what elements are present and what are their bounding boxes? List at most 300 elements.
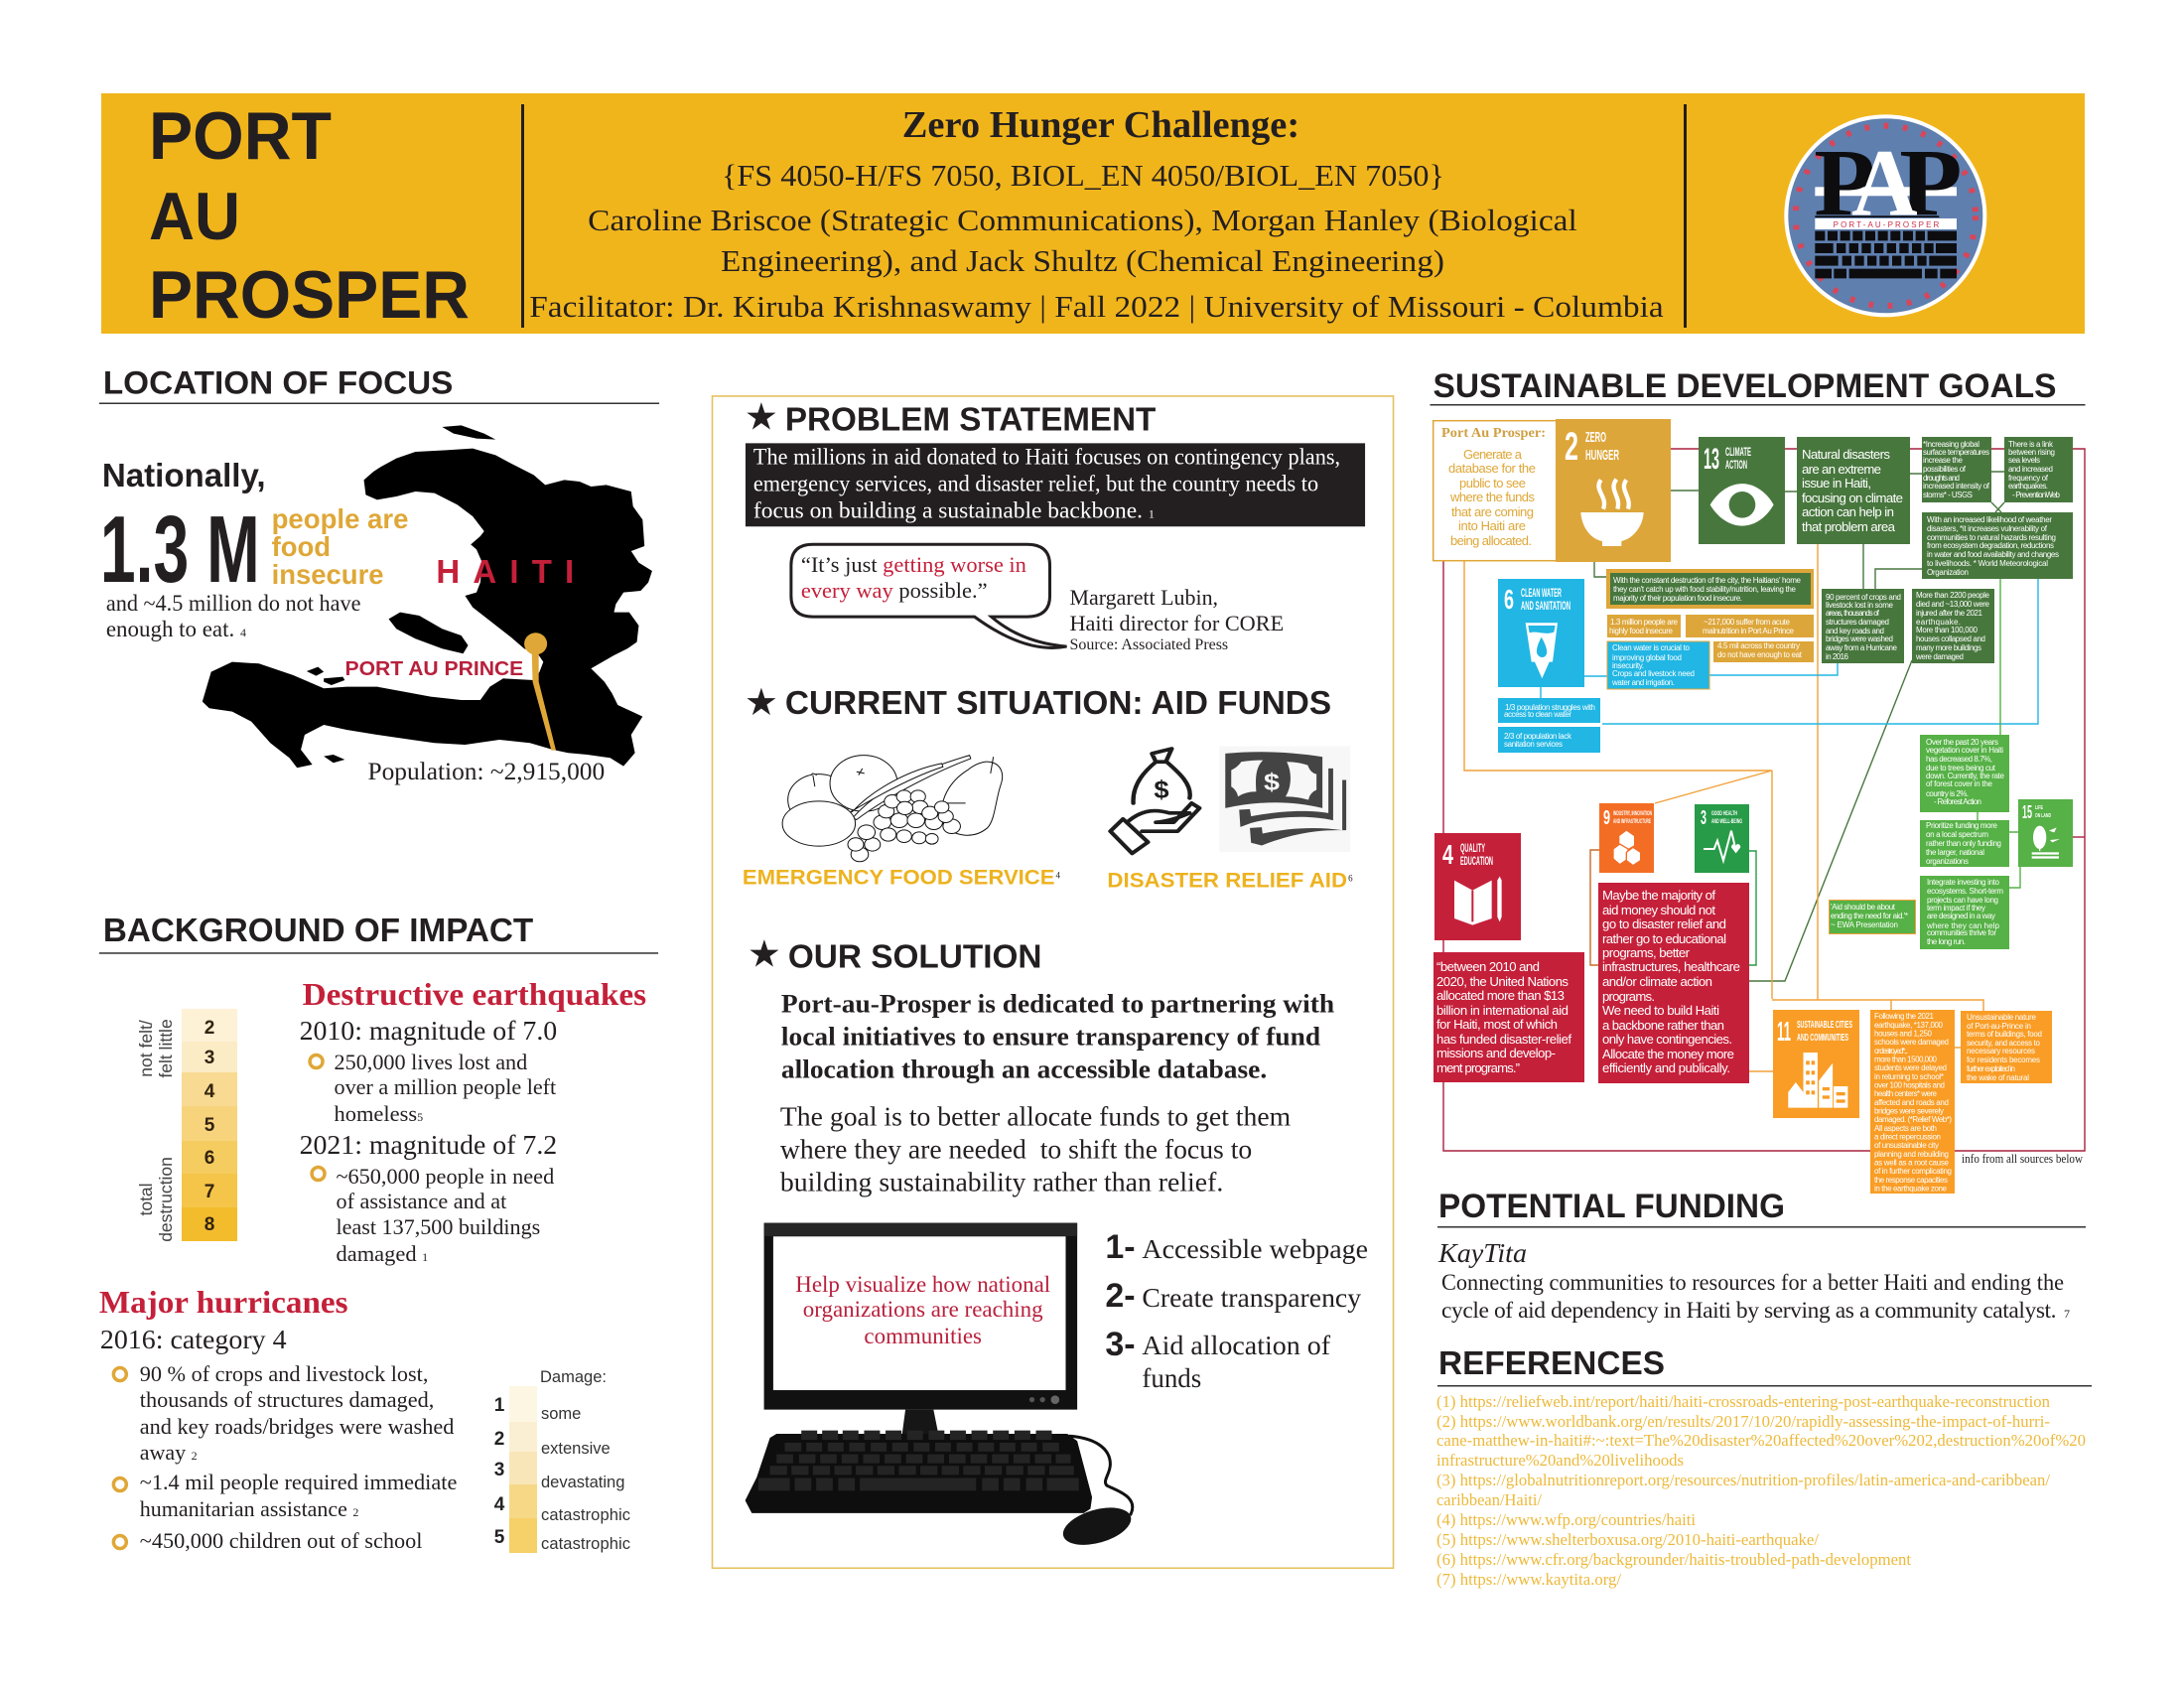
SDG text: United Nations aid: allocated more than $13 xyxy=(1436,988,1565,1003)
solution steps list: 2- xyxy=(1105,1277,1136,1315)
hurricane damage scale: catastrophic xyxy=(541,1535,630,1553)
SDG tile 3: good health: GOOD HEALTH xyxy=(1711,810,1737,817)
SDG text: prioritize funding: the larger, national xyxy=(1926,848,1984,857)
SDG text: crops lost: 90 percent of crops and xyxy=(1826,593,1901,602)
challenge title and team: Zero Hunger Challenge: xyxy=(902,104,1299,146)
stat: nationally food insecure: people are xyxy=(272,503,408,534)
references list: (2) https://www.worldbank.org/en/results/2017/10/20/rapidly-assessing-the-impact-of-hurri- xyxy=(1436,1412,2050,1431)
SDG text: earthquake impacts: or destroyed*... xyxy=(1874,1047,1908,1055)
SDG stat: 1.3 million xyxy=(1607,615,1681,637)
speech bubble quote xyxy=(791,544,1066,647)
text: major hurricanes: 90 % of crops and livestock lost, xyxy=(140,1361,428,1386)
SDG text: United Nations aid: for Haiti, most of which xyxy=(1436,1017,1558,1032)
SDG text: weather disasters: disasters, *it increases vulnerability of xyxy=(1927,524,2048,533)
SDG stat: 217,000 malnutrition: malnutrition in Port Au Prince xyxy=(1703,627,1795,635)
earthquake scale: destruction xyxy=(156,1157,176,1242)
SDG text: integrate investing: are designed in a way xyxy=(1927,912,1995,920)
SDG text: vegetation cover: has decreased 8.7%, xyxy=(1926,755,1992,764)
SDG text: United Nations aid: 2020, the United Nations xyxy=(1436,974,1569,989)
SDG text: prioritize funding: on a local spectrum xyxy=(1926,830,1988,839)
SDG tile 2: zero hunger: HUNGER xyxy=(1585,447,1619,464)
heading: current situation: ★ xyxy=(745,680,778,724)
SDG text: weather disasters: to livelihoods. * World Meteorological xyxy=(1927,559,2048,568)
problem statement box: The millions in aid donated to Haiti focuses on contingency plans, xyxy=(753,444,1340,470)
text: major hurricanes: and key roads/bridges were washed xyxy=(140,1414,454,1439)
SDG text: call to action: rather go to educational xyxy=(1602,931,1726,946)
icon: bowl xyxy=(1580,480,1644,546)
SDG text: natural disasters: focusing on climate xyxy=(1802,491,1903,505)
caption: disaster relief aid: DISASTER RELIEF AID xyxy=(1107,869,1347,893)
text: major hurricanes: thousands of structures damaged, xyxy=(140,1387,434,1412)
solution statement: allocation through an accessible database. xyxy=(781,1055,1267,1083)
SDG tile 3: good health: AND WELL-BEING xyxy=(1711,818,1742,825)
SDG text: United Nations aid: has funded disaster-relief xyxy=(1436,1032,1571,1047)
SDG text: clean water: Crops and livestock need xyxy=(1612,669,1695,678)
screen text xyxy=(795,1272,1050,1348)
SDG callout: Port Au Prosper: Generate a xyxy=(1463,447,1523,462)
SDG stat: sanitation xyxy=(1498,727,1600,753)
hurricane damage scale: extensive xyxy=(541,1440,611,1458)
SDG text: clean water: water and irrigation. xyxy=(1611,678,1675,687)
solution goal text: where they are needed to shift the focus to xyxy=(780,1134,1252,1164)
SDG text: earthquake deaths: many more buildings xyxy=(1916,643,1981,652)
references list: (5) https://www.shelterboxusa.org/2010-haiti-earthquake/ xyxy=(1436,1530,1819,1549)
SDG text: vegetation cover: due to trees being cut xyxy=(1926,764,1996,773)
SDG stat: 1.3 million: 1.3 million people are xyxy=(1610,618,1679,627)
text: destructive earthquakes: of assistance and at xyxy=(337,1189,507,1213)
SDG text: unsustainable nature: further exploited in xyxy=(1967,1064,2015,1073)
SDG text: unsustainable nature: the wake of natural xyxy=(1967,1073,2029,1082)
solution goal text: The goal is to better allocate funds to get them xyxy=(780,1101,1291,1131)
SDG text: crops lost xyxy=(1822,589,1904,663)
icon: eye with globe xyxy=(1710,484,1774,526)
SDG text: earthquake deaths: More than 100,000 xyxy=(1916,626,1979,634)
SDG text: weather disasters: from ecosystem degradation, reductions xyxy=(1927,541,2054,550)
text: KayTita funding: Connecting communities to resources for a better Haiti and ending the xyxy=(1441,1270,2064,1296)
icon: heartbeat xyxy=(1704,831,1740,861)
SDG tile 4: quality education: QUALITY xyxy=(1460,843,1485,855)
SDG text: call to action: go to disaster relief and xyxy=(1602,916,1726,931)
note: info from sources: info from all sources below xyxy=(1962,1152,2083,1166)
SDG text: earthquake impacts: earthquake, *137,000 xyxy=(1874,1021,1944,1030)
heading: background of impact: BACKGROUND OF IMPACT xyxy=(103,912,533,948)
icon: tree xyxy=(2032,826,2060,859)
SDG tile 3: good health xyxy=(1695,804,1749,873)
SDG text: earthquake deaths: died and ~13,000 were xyxy=(1916,600,1990,609)
SDG text: call to action: Maybe the majority of xyxy=(1602,888,1715,903)
challenge title and team: Caroline Briscoe (Strategic Communications), Morgan Hanley (Biological xyxy=(588,203,1577,237)
SDG text: earthquake deaths xyxy=(1912,589,1994,663)
icon: cash bills: $ xyxy=(1264,769,1280,795)
panel: center column xyxy=(712,394,1394,1568)
SDG text: call to action: a backbone rather than xyxy=(1602,1018,1724,1033)
illustration: computer xyxy=(746,1223,1136,1552)
solution goal text xyxy=(780,1101,1291,1196)
SDG text: integrate investing: Integrate investing into xyxy=(1927,878,2000,887)
SDG text: unsustainable nature: for residents becomes xyxy=(1967,1055,2040,1064)
SDG tile 2: zero hunger xyxy=(1556,419,1671,562)
SDG text: United Nations aid: billion in international aid xyxy=(1436,1003,1569,1018)
references list: infrastructure%20and%20livelihoods xyxy=(1436,1451,1684,1470)
heading: current situation: CURRENT SITUATION: AID FUNDS xyxy=(785,684,1331,721)
SDG text: earthquake deaths: were damaged xyxy=(1915,652,1964,661)
SDG tile 13: climate action: CLIMATE xyxy=(1725,445,1751,459)
stat: nationally food insecure: insecure xyxy=(272,559,384,590)
SDG text: crops lost: structures damaged xyxy=(1826,618,1889,627)
heading: our solution: ★ xyxy=(748,932,781,976)
SDG diagram connectors xyxy=(1443,449,2085,1151)
SDG text: clean water xyxy=(1607,641,1709,689)
SDG text: integrate investing: ecosystems. Short-term xyxy=(1927,887,2003,896)
SDG text: surface temperatures: possibilities of xyxy=(1923,465,1967,474)
SDG tile 2: zero hunger: 2 xyxy=(1565,425,1578,469)
text: destructive earthquakes: over a million people left xyxy=(335,1074,557,1099)
SDG text: earthquake impacts: as well as a root cause xyxy=(1874,1158,1950,1168)
SDG text: weather disasters: in water and food availability and changes xyxy=(1927,550,2059,559)
SDG text: call to action: aid money should not xyxy=(1602,903,1715,917)
SDG tile 11: sustainable cities: SUSTAINABLE CITIES xyxy=(1797,1020,1852,1031)
SDG text: call to action: programs. xyxy=(1602,989,1655,1004)
SDG text: integrate investing: where they can help xyxy=(1926,921,2000,930)
SDG stat: sanitation: 2/3 of population lack xyxy=(1504,732,1572,741)
hurricane damage scale: 5 xyxy=(494,1527,505,1548)
SDG text: unsustainable nature: Unsustainable nature xyxy=(1967,1013,2037,1022)
SDG text: weather disasters: Organization xyxy=(1927,568,1969,577)
heading: problem statement: ★ xyxy=(745,394,778,438)
text: major hurricanes: away 2 xyxy=(140,1440,198,1465)
SDG text: call to action: Allocate the money more xyxy=(1602,1047,1734,1061)
icon: city xyxy=(1788,1053,1847,1108)
SDG tile 4: quality education: 4 xyxy=(1442,839,1453,870)
references list: (7) https://www.kaytita.org/ xyxy=(1436,1570,1621,1589)
problem statement box xyxy=(746,443,1365,526)
references list: cane-matthew-in-haiti#:~:text=The%20disaster%20affected%20over%202,destruction%20of%20 xyxy=(1436,1431,2086,1450)
SDG text: call to action: only have contingencies. xyxy=(1602,1032,1732,1047)
SDG text: natural disasters: issue in Haiti, xyxy=(1802,476,1871,491)
stat: nationally food insecure xyxy=(100,457,408,641)
SDG callout: Port Au Prosper xyxy=(1433,421,1557,561)
SDG text: unsustainable nature: of Port-au-Prince in xyxy=(1967,1022,2031,1031)
SDG text: crops lost: away from a Hurricane xyxy=(1826,643,1898,652)
SDG text: call to action: We need to build Haiti xyxy=(1602,1003,1719,1018)
text: destructive earthquakes xyxy=(300,977,646,1266)
SDG text: integrate investing: projects can have long xyxy=(1927,896,1998,905)
references list: (6) https://www.cfr.org/backgrounder/haitis-troubled-path-development xyxy=(1436,1550,1911,1569)
project name: AU xyxy=(149,179,240,254)
problem statement box: focus on building a sustainable backbone. 1 xyxy=(753,497,1155,523)
SDG text: surface temperatures: increase the xyxy=(1923,456,1964,465)
text: destructive earthquakes: Destructive earthquakes xyxy=(303,977,646,1012)
SDG text: prioritize funding: rather than only funding xyxy=(1926,839,2001,848)
SDG tile 11: sustainable cities: 11 xyxy=(1777,1016,1791,1047)
SDG text: United Nations aid xyxy=(1433,952,1584,1082)
heading: our solution: OUR SOLUTION xyxy=(788,938,1042,975)
challenge title and team: Engineering), and Jack Shultz (Chemical Engineering) xyxy=(721,243,1444,278)
logo: PAP keyboard: P xyxy=(1899,130,1963,236)
icon: fruit and vegetables xyxy=(782,756,1003,862)
hurricane damage scale: 1 xyxy=(494,1395,505,1416)
screen text: Help visualize how national xyxy=(795,1272,1050,1297)
SDG text: crops lost: bridges were washed xyxy=(1826,634,1893,643)
text: KayTita funding: 7 xyxy=(2064,1307,2070,1321)
SDG text: clean water: Clean water is crucial to xyxy=(1612,643,1691,652)
SDG stat: access to clean water xyxy=(1498,698,1600,723)
icon: cubes xyxy=(1613,830,1641,866)
stat: nationally food insecure: 1.3 M xyxy=(100,496,260,603)
challenge title and team xyxy=(529,104,1664,324)
SDG text: earthquake deaths: More than 2200 people xyxy=(1916,591,1990,600)
solution steps list: Accessible webpage xyxy=(1142,1234,1368,1264)
quote attribution: Source: Associated Press xyxy=(1069,636,1228,653)
SDG text: aid should end need: ending the need for aid.'* xyxy=(1831,912,1908,920)
SDG text: surface temperatures: droughts and xyxy=(1923,474,1960,483)
SDG stat: 4.5 million xyxy=(1713,641,1814,662)
SDG text: call to action: infrastructures, healthcare xyxy=(1602,959,1740,974)
SDG text: earthquake deaths: earthquake. xyxy=(1916,618,1961,627)
SDG tile 11: sustainable cities xyxy=(1773,1010,1859,1118)
earthquake scale: 8 xyxy=(205,1214,214,1235)
challenge title and team: {FS 4050-H/FS 7050, BIOL_EN 4050/BIOL_EN 7050} xyxy=(722,158,1444,193)
SDG text: earthquake impacts: students were delayed xyxy=(1874,1063,1947,1072)
solution goal text: building sustainability rather than relief. xyxy=(780,1167,1223,1196)
quote attribution: Haiti director for CORE xyxy=(1069,611,1284,635)
text: destructive earthquakes: 250,000 lives lost and xyxy=(335,1050,527,1074)
earthquake scale: not felt/ xyxy=(136,1020,156,1077)
text: major hurricanes: humanitarian assistance 2 xyxy=(140,1496,358,1521)
SDG text: call to action: efficiently and publically. xyxy=(1602,1060,1730,1075)
SDG text: earthquake impacts: more than 1500,000 xyxy=(1874,1055,1938,1064)
icon: water glass xyxy=(1526,623,1558,678)
solution steps list: funds xyxy=(1142,1363,1201,1393)
map of Haiti xyxy=(203,425,652,768)
SDG stat: 217,000 malnutrition xyxy=(1686,615,1814,637)
SDG text: vegetation cover: country is 2%. xyxy=(1926,789,1969,798)
SDG text: constant destruction: majority of their population food insecure. xyxy=(1613,594,1742,603)
logo: PAP keyboard: PORT-AU-PROSPER xyxy=(1834,220,1940,229)
SDG text: sea levels: There is a link xyxy=(2008,440,2054,449)
map labels: PORT AU PRINCE xyxy=(345,658,523,680)
SDG callout: Port Au Prosper: public to see xyxy=(1459,476,1526,491)
SDG text: sea levels: sea levels xyxy=(2008,456,2040,465)
SDG text: call to action: and/or climate action xyxy=(1602,974,1712,989)
SDG text: earthquake deaths: houses collapsed and xyxy=(1916,634,1985,643)
hurricane damage scale xyxy=(494,1368,630,1553)
earthquake scale: 3 xyxy=(205,1048,214,1068)
SDG text: prioritize funding: organizations xyxy=(1926,857,1969,866)
SDG text: earthquake impacts: a direct repercussion xyxy=(1874,1132,1941,1142)
earthquake scale: 2 xyxy=(205,1018,214,1039)
SDG callout: Port Au Prosper: being allocated. xyxy=(1450,533,1532,548)
SDG text: unsustainable nature: security, and access to xyxy=(1967,1039,2041,1048)
SDG text: vegetation cover: vegetation cover in Haiti xyxy=(1926,746,2003,755)
SDG text: sea levels: between rising xyxy=(2008,448,2055,457)
stat: nationally food insecure: Nationally, xyxy=(102,457,266,493)
SDG tile 11: sustainable cities: AND COMMUNITIES xyxy=(1797,1033,1848,1044)
icon: cash bills xyxy=(1219,747,1350,852)
SDG text: earthquake impacts xyxy=(1870,1010,1955,1194)
SDG text: natural disasters: that problem area xyxy=(1802,519,1896,534)
SDG text: vegetation cover: Over the past 20 years xyxy=(1926,738,1998,747)
heading: problem statement: PROBLEM STATEMENT xyxy=(785,400,1156,437)
SDG text: vegetation cover: - Reforest Action xyxy=(1934,797,1981,806)
SDG stat: sanitation: sanitation services xyxy=(1504,740,1563,749)
SDG text: surface temperatures: surface temperatures xyxy=(1923,448,1989,457)
SDG tile 6: clean water: CLEAN WATER xyxy=(1521,588,1562,600)
map labels xyxy=(345,553,605,785)
text: KayTita funding xyxy=(1437,1238,2070,1324)
SDG text: prioritize funding: Prioritize funding more xyxy=(1926,821,1998,830)
SDG text: vegetation cover: down. Currently, the rate xyxy=(1926,772,2005,780)
SDG text: call to action xyxy=(1598,883,1749,1083)
SDG text: United Nations aid: missions and develop- xyxy=(1436,1046,1556,1060)
SDG text: surface temperatures: storms* - USGS xyxy=(1923,491,1973,499)
SDG text: surface temperatures: *Increasing global xyxy=(1923,440,1979,449)
SDG text: earthquake impacts: health centers* were xyxy=(1874,1089,1938,1098)
SDG text: weather disasters: communities to natural hazards resulting xyxy=(1927,533,2056,542)
heading: potential funding: POTENTIAL FUNDING xyxy=(1438,1188,1785,1225)
map labels: HAITI xyxy=(436,553,574,590)
hurricane damage scale: catastrophic xyxy=(541,1506,630,1524)
icon: money bag in hand: $ xyxy=(1154,775,1169,803)
SDG tile 9: industry: INDUSTRY, INNOVATION xyxy=(1613,810,1652,817)
SDG text: aid should end need xyxy=(1829,900,1916,933)
solution statement: local initiatives to ensure transparency of fund xyxy=(781,1023,1321,1052)
SDG text: earthquake impacts: of unsustainable city xyxy=(1874,1141,1939,1150)
logo: PAP keyboard xyxy=(1784,114,1986,317)
SDG callout: Port Au Prosper: where the funds xyxy=(1449,490,1535,504)
text: destructive earthquakes: least 137,500 buildings xyxy=(337,1214,540,1239)
SDG text: vegetation cover xyxy=(1920,735,2009,812)
SDG tile 9: industry xyxy=(1599,803,1654,873)
SDG stat: 1.3 million: highly food insecure xyxy=(1609,627,1674,635)
SDG text: natural disasters: are an extreme xyxy=(1802,462,1881,477)
SDG tile 13: climate action xyxy=(1699,437,1785,544)
references list: (4) https://www.wfp.org/countries/haiti xyxy=(1436,1510,1696,1529)
SDG tile 9: industry: 9 xyxy=(1603,807,1610,829)
SDG text: natural disasters: action can help in xyxy=(1802,504,1894,519)
SDG tile 2: zero hunger: ZERO xyxy=(1585,429,1606,446)
SDG text: earthquake impacts: over 100 hospitals and xyxy=(1874,1080,1945,1090)
earthquake scale: felt little xyxy=(156,1019,176,1078)
SDG tile 15: life on land: 15 xyxy=(2022,802,2032,822)
SDG text: constant destruction xyxy=(1606,569,1814,609)
earthquake scale xyxy=(136,1009,237,1242)
SDG text: clean water: improving global food xyxy=(1612,653,1682,662)
SDG callout: Port Au Prosper: that are coming xyxy=(1451,504,1534,519)
SDG text: earthquake impacts: in returning to school* xyxy=(1874,1072,1944,1081)
SDG tile 6: clean water xyxy=(1498,579,1584,687)
hurricane damage scale: 3 xyxy=(494,1460,504,1480)
SDG text: earthquake impacts: Following the 2021 xyxy=(1874,1012,1935,1021)
SDG text: United Nations aid: ment programs.” xyxy=(1436,1060,1520,1075)
speech bubble quote: “It’s just getting worse in xyxy=(801,552,1026,577)
SDG text: crops lost: and key roads and xyxy=(1826,627,1884,635)
icon: book and pencil xyxy=(1454,877,1502,925)
SDG text: vegetation cover: of forest cover in the xyxy=(1926,779,1993,788)
SDG text: unsustainable nature xyxy=(1961,1011,2052,1083)
SDG text: earthquake impacts: of in further complicating xyxy=(1874,1167,1952,1176)
SDG stat: 4.5 million: 4.5 mil across the country xyxy=(1717,641,1800,650)
quote attribution xyxy=(1069,585,1284,653)
SDG text: aid should end need: ~ EWA Presentation xyxy=(1831,920,1898,929)
SDG text: earthquake impacts: damaged. (*Relief Web*) xyxy=(1874,1115,1952,1124)
SDG stat: 4.5 million: do not have enough to eat xyxy=(1717,650,1803,659)
SDG text: United Nations aid: “between 2010 and xyxy=(1436,959,1540,974)
SDG tile 6: clean water: AND SANITATION xyxy=(1521,601,1570,613)
SDG text: sea levels: - PreventionWeb xyxy=(2012,491,2061,499)
hurricane damage scale: some xyxy=(541,1405,581,1423)
challenge title and team: Facilitator: Dr. Kiruba Krishnaswamy | Fall 2022 | University of Missouri - Columbia xyxy=(529,289,1664,324)
SDG text: sea levels: and increased xyxy=(2008,465,2053,474)
solution steps list: Create transparency xyxy=(1142,1283,1362,1313)
SDG stat: access to clean water: access to clean water xyxy=(1504,710,1571,719)
text: major hurricanes: ~450,000 children out of school xyxy=(140,1528,422,1553)
SDG stat: access to clean water: 1/3 population struggles with xyxy=(1505,703,1595,712)
project name xyxy=(149,98,470,333)
stat: nationally food insecure: enough to eat. 4 xyxy=(106,617,246,641)
SDG text: call to action: programs, better xyxy=(1602,945,1691,960)
map pin: Port au Prince xyxy=(524,633,556,751)
SDG text: earthquake impacts: All aspects are both xyxy=(1874,1124,1937,1133)
SDG text: surface temperatures xyxy=(1922,437,1991,502)
heading: location of focus: LOCATION OF FOCUS xyxy=(103,364,453,401)
earthquake scale: 4 xyxy=(205,1081,215,1102)
solution steps list xyxy=(1105,1228,1368,1393)
SDG callout: Port Au Prosper: into Haiti are xyxy=(1458,518,1526,533)
SDG text: unsustainable nature: terms of buildings, food xyxy=(1967,1030,2042,1039)
SDG text: earthquake impacts: houses and 1,250 xyxy=(1874,1029,1933,1039)
SDG text: constant destruction: With the constant destruction of the city, the Haitians' home xyxy=(1613,576,1802,585)
SDG text: earthquake deaths: injured after the 2021 xyxy=(1916,609,1983,618)
quote attribution: Margarett Lubin, xyxy=(1069,585,1218,610)
text: major hurricanes: ~1.4 mil people required immediate xyxy=(140,1470,457,1494)
SDG text: aid should end need: 'Aid should be about xyxy=(1831,903,1896,912)
SDG tile 4: quality education xyxy=(1434,833,1521,940)
solution steps list: 3- xyxy=(1105,1326,1136,1363)
logo: PAP keyboard: P xyxy=(1814,130,1875,236)
SDG tile 15: life on land: ON LAND xyxy=(2035,813,2051,819)
SDG text: earthquake impacts: bridges were severely xyxy=(1874,1106,1944,1116)
SDG tile 15: life on land: LIFE xyxy=(2035,805,2043,811)
SDG text: earthquake impacts: in the earthquake zone xyxy=(1874,1184,1948,1194)
text: destructive earthquakes: 2010: magnitude of 7.0 xyxy=(300,1016,557,1046)
SDG text: clean water: insecurity. xyxy=(1612,661,1644,670)
SDG tile 3: good health: 3 xyxy=(1701,807,1706,829)
map labels: Population: ~2,915,000 xyxy=(367,759,605,785)
heading: references: REFERENCES xyxy=(1438,1344,1665,1381)
SDG callout: Port Au Prosper: Port Au Prosper: xyxy=(1441,426,1546,441)
screen text: communities xyxy=(864,1324,982,1348)
SDG text: earthquake impacts: affected and roads and xyxy=(1874,1098,1949,1107)
logo: PAP keyboard: A xyxy=(1851,130,1918,236)
hurricane damage scale: Damage: xyxy=(540,1368,607,1386)
solution steps list: Aid allocation of xyxy=(1142,1331,1330,1360)
hurricane damage scale: 2 xyxy=(494,1429,504,1450)
references list xyxy=(1436,1392,2086,1589)
SDG tile 4: quality education: EDUCATION xyxy=(1460,856,1493,868)
references list: (1) https://reliefweb.int/report/haiti/haiti-crossroads-entering-post-earthquake-reconstruction xyxy=(1436,1392,2050,1411)
SDG text: weather disasters xyxy=(1922,512,2073,579)
SDG text: earthquake impacts: planning and rebuilding xyxy=(1874,1150,1949,1159)
hurricane damage scale: devastating xyxy=(541,1474,624,1491)
references list: (3) https://globalnutritionreport.org/resources/nutrition-profiles/latin-america-and-caribbean/ xyxy=(1436,1471,2050,1489)
solution steps list: 1- xyxy=(1105,1228,1136,1266)
SDG tile 6: clean water: 6 xyxy=(1504,584,1514,615)
SDG text: natural disasters: Natural disasters xyxy=(1802,447,1890,462)
solution statement: Port-au-Prosper is dedicated to partnering with xyxy=(781,990,1335,1019)
text: major hurricanes: Major hurricanes xyxy=(99,1285,348,1320)
SDG stat: 217,000 malnutrition: ~217,000 suffer from acute xyxy=(1704,618,1791,627)
